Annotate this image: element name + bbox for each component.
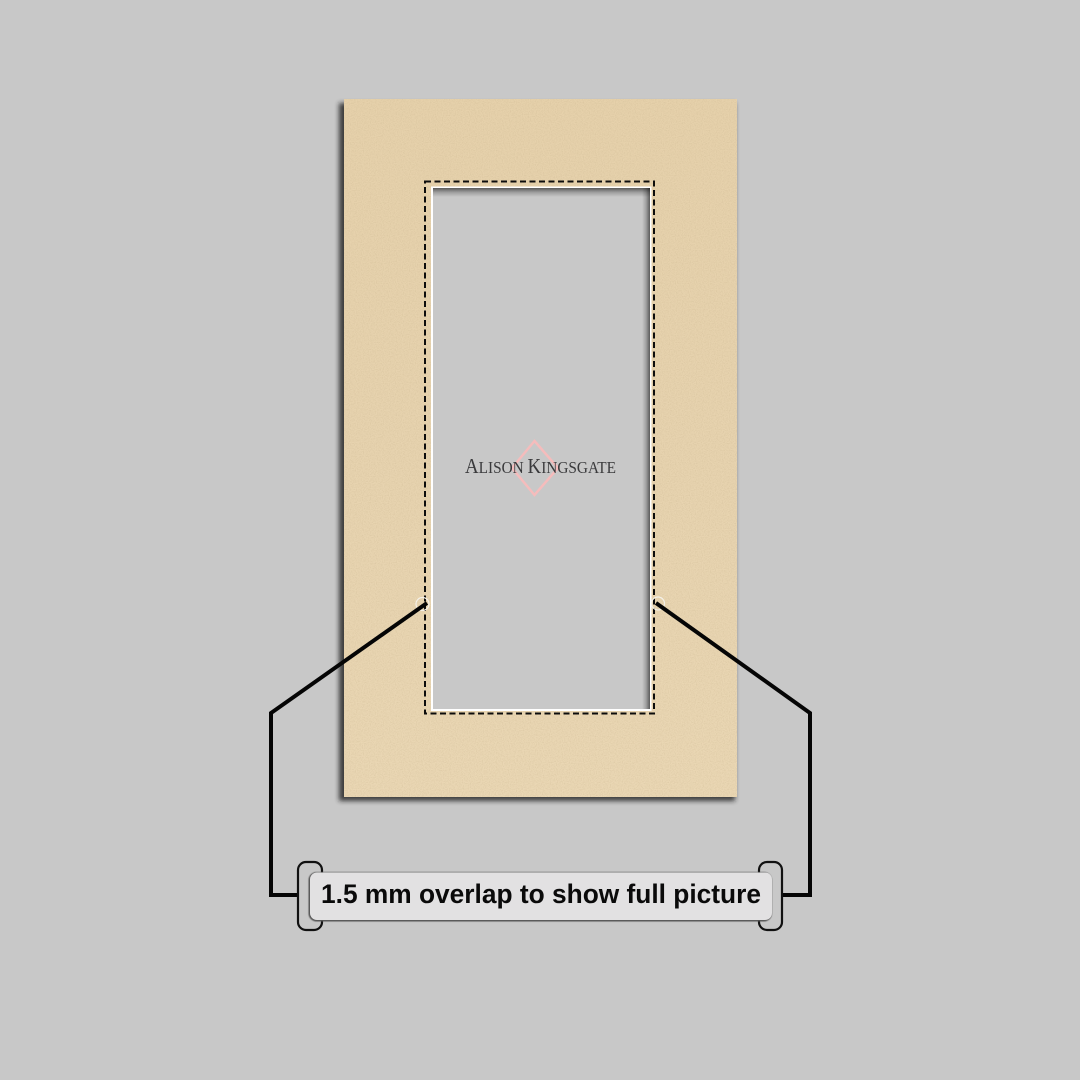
mount board texture [344,99,737,797]
left connector [271,603,427,895]
label text: 1.5 mm overlap to show full picture [321,879,761,909]
left bracket tab [298,862,322,930]
left leader line [271,598,429,895]
window opening [433,188,650,709]
label box [310,872,772,920]
logo: Alison Kingsgate [465,441,616,495]
panel: mount board with window [339,99,737,801]
right connector [656,603,810,895]
icon: pink diamond [512,441,558,495]
callout label [298,862,782,930]
mount drop shadow [339,103,735,801]
right leader line [652,597,810,895]
logo wordmark: ALISON KINGSGATE [465,454,616,478]
window inner shadow: top [433,188,650,197]
mount board surface [344,99,737,797]
label shadow [308,872,772,922]
marker circle right [652,597,664,610]
marker circle left [416,598,429,610]
dashed overlap outline [425,182,654,714]
window white bevel [431,186,652,711]
right bracket tab [759,862,782,930]
window inner shadow: right [642,188,650,709]
